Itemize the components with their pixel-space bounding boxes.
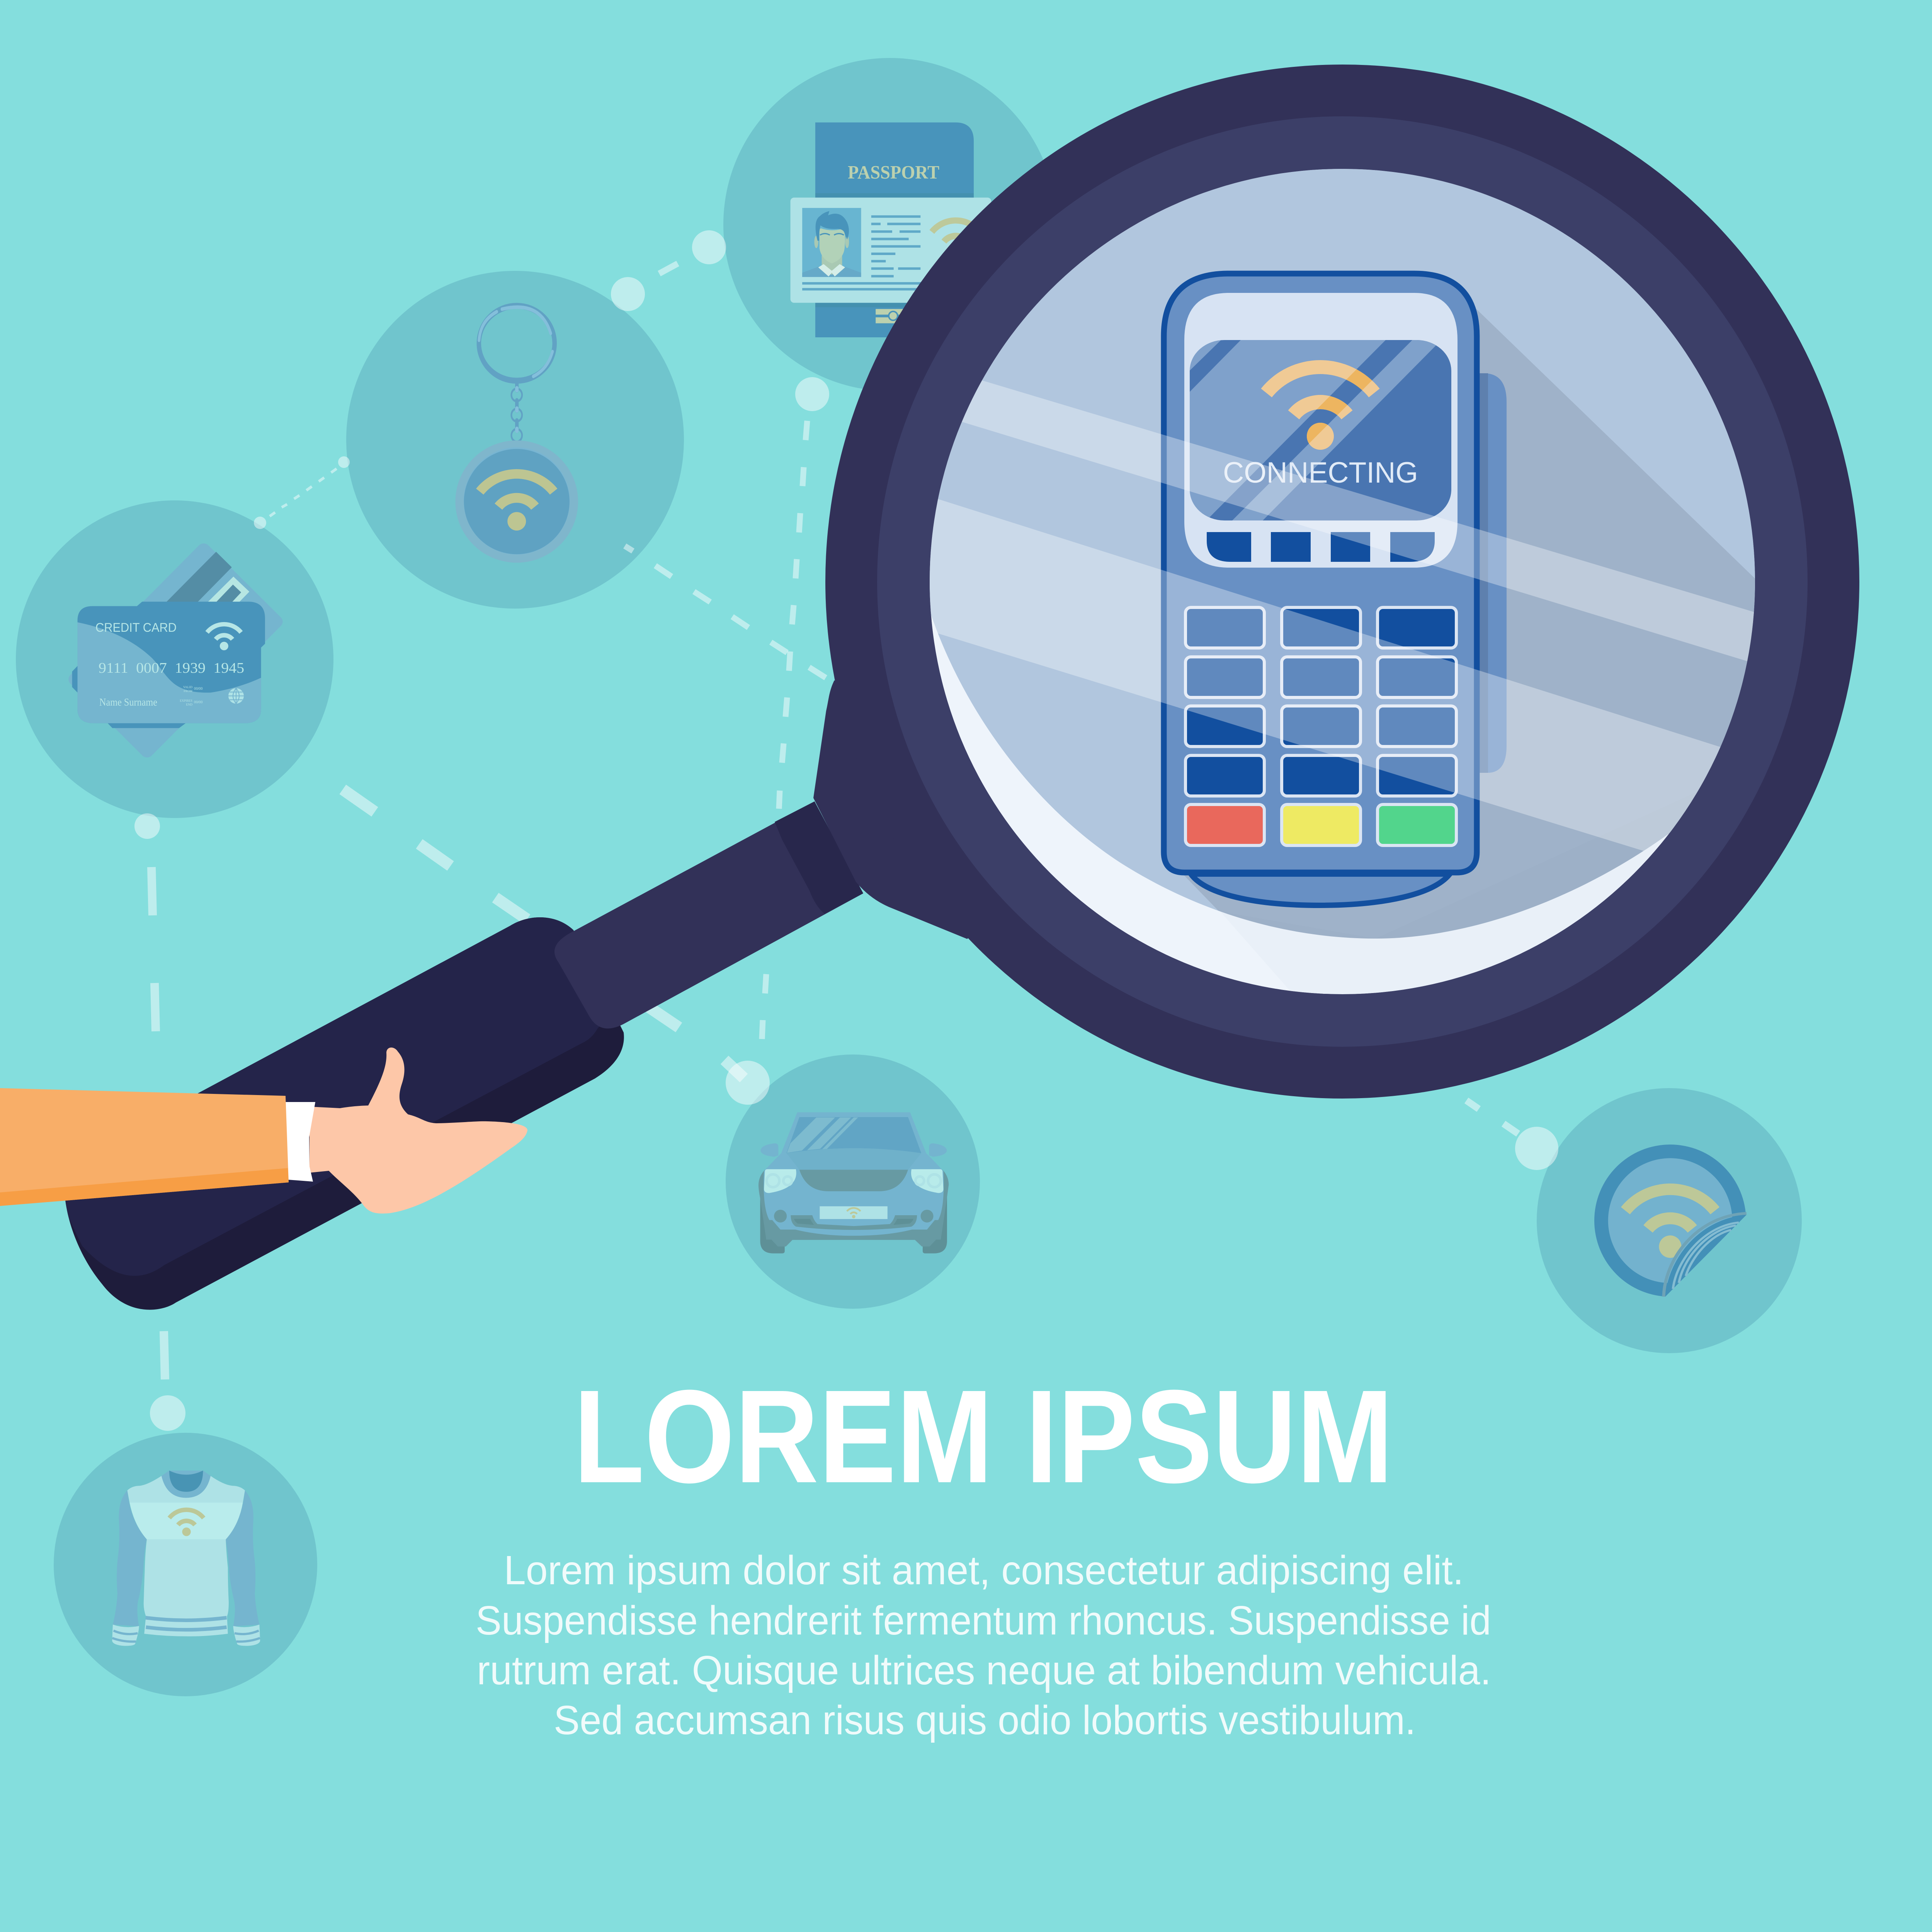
body text <box>476 1548 1491 1743</box>
credit card text: Name Surname <box>99 696 157 708</box>
body text: Sed accumsan risus quis odio lobortis vestibulum. <box>554 1697 1416 1743</box>
body text: rutrum erat. Quisque ultrices neque at bibendum vehicula. <box>477 1648 1491 1693</box>
connecting label: CONNECTING <box>1223 456 1418 489</box>
terminal soft keys <box>1207 532 1435 562</box>
credit card text <box>95 621 244 708</box>
payment terminal <box>1164 274 1507 905</box>
icon: credit card <box>72 549 276 752</box>
lens glass <box>930 169 1755 994</box>
title: LOREM IPSUM <box>573 1362 1393 1510</box>
magnifier handle <box>39 680 1236 1333</box>
credit card text: EXPIRES <box>180 699 192 702</box>
body text: Suspendisse hendrerit fermentum rhoncus. Suspendisse id <box>476 1598 1491 1643</box>
icon: passport <box>791 122 991 337</box>
lens glare bands <box>889 352 1777 892</box>
credit card text: CREDIT CARD <box>95 621 177 634</box>
credit card text: FROM <box>184 689 192 693</box>
terminal body <box>1164 274 1477 872</box>
terminal side card <box>1476 373 1507 773</box>
hand <box>310 1048 527 1214</box>
magnifier lens group <box>825 65 1893 1159</box>
magnifier outer ring <box>825 65 1859 1099</box>
shirt cuff <box>286 1102 315 1182</box>
hand holding magnifier <box>0 1048 527 1214</box>
handle collar <box>813 680 1236 939</box>
sleeve <box>0 1088 289 1206</box>
icon: car <box>759 1112 949 1253</box>
handle collar band <box>775 801 863 914</box>
magnifier inner ring <box>877 116 1808 1047</box>
credit card text: 00/00 <box>194 687 203 690</box>
terminal base lip <box>1191 874 1450 905</box>
keypad <box>1185 607 1456 845</box>
credit card text: END <box>186 703 192 706</box>
credit card text: VALID <box>183 685 192 689</box>
terminal display panel <box>1184 293 1458 568</box>
body text: Lorem ipsum dolor sit amet, consectetur adipiscing elit. <box>504 1548 1464 1593</box>
icon: key ring tag <box>455 306 578 563</box>
handle stem <box>554 801 863 1029</box>
credit card text: 9111 0007 1939 1945 <box>99 660 244 676</box>
credit card text: 00/00 <box>194 700 203 704</box>
terminal screen <box>1190 340 1451 520</box>
passport label: PASSPORT <box>848 162 939 183</box>
dashed connectors and dots <box>134 230 1558 1431</box>
handle grip <box>65 917 624 1310</box>
icon: globe on card <box>228 688 244 704</box>
sleeve shadow <box>0 1168 289 1206</box>
wifi symbol on screen <box>1261 360 1380 450</box>
icon circles <box>16 58 1802 1696</box>
icon: sweater <box>112 1471 260 1646</box>
icon: sticker <box>1594 1145 1783 1323</box>
